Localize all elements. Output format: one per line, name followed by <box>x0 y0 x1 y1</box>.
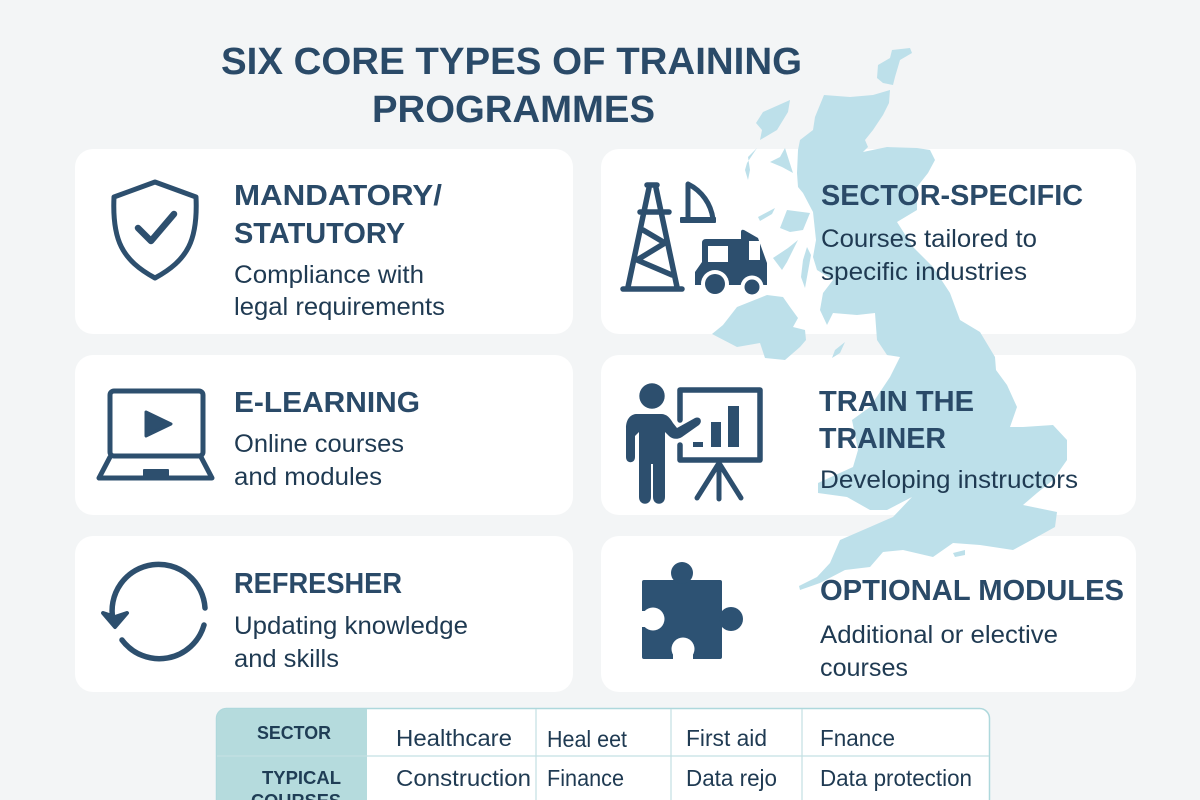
description: compliance <box>234 261 445 321</box>
description: online courses: and modules <box>234 463 382 491</box>
table row: sector <box>396 725 895 752</box>
description: developing instructors: Developing instructors <box>820 466 1078 494</box>
icon: presenter with chart board <box>626 383 760 504</box>
table row: typical courses: Construction <box>396 765 531 791</box>
description: online courses: Online courses <box>234 430 404 458</box>
icon: shield with check <box>114 182 196 278</box>
table row labels: SECTOR <box>257 723 331 743</box>
heading: train the trainer: TRAIN THE <box>819 386 974 418</box>
icon: puzzle piece <box>640 562 743 660</box>
description: tailored courses: specific industries <box>821 258 1027 286</box>
heading: mandatory/statutory: STATUTORY <box>234 218 405 250</box>
heading: train the trainer: TRAINER <box>819 423 946 455</box>
title: SIX CORE TYPES OF TRAINING <box>221 41 802 83</box>
icon: oil rig, sail and truck <box>623 184 767 298</box>
table row: typical courses: Finance <box>547 765 624 791</box>
table row labels <box>251 723 341 800</box>
heading: refresher: REFRESHER <box>234 568 402 600</box>
table row: typical courses: Data rejo <box>686 765 777 791</box>
description: elective courses: courses <box>820 654 908 682</box>
heading: optional modules: OPTIONAL MODULES <box>820 575 1124 607</box>
description: elective courses: Additional or elective <box>820 621 1058 649</box>
description: compliance: legal requirements <box>234 293 445 321</box>
table row: typical courses <box>396 765 972 791</box>
heading: train the trainer <box>819 386 974 455</box>
description: compliance: Compliance with <box>234 261 424 289</box>
description: updating knowledge <box>234 612 468 673</box>
table row: sector: First aid <box>686 725 767 751</box>
description: online courses <box>234 430 404 491</box>
table row labels: TYPICAL <box>262 768 341 788</box>
panel: sector-specific <box>601 149 1136 334</box>
table row: typical courses: Data protection <box>820 765 972 791</box>
panel: train the trainer <box>601 355 1136 515</box>
description: tailored courses: Courses tailored to <box>821 225 1037 253</box>
table row: sector: Heal eet <box>547 726 628 752</box>
title <box>221 41 802 131</box>
panel: optional modules <box>601 536 1136 692</box>
table: sectors and typical courses <box>216 708 990 800</box>
title: PROGRAMMES <box>372 89 655 131</box>
table header column <box>217 709 367 800</box>
heading: e-learning: E-LEARNING <box>234 387 420 419</box>
heading: sector-specific: SECTOR-SPECIFIC <box>821 180 1083 212</box>
heading: mandatory/statutory: MANDATORY/ <box>234 180 442 212</box>
panel: refresher <box>75 536 573 692</box>
icon: refresh arrows <box>103 564 205 659</box>
description: updating knowledge: and skills <box>234 645 339 673</box>
panel: e-learning <box>75 355 573 515</box>
table row: sector: Healthcare <box>396 725 512 751</box>
UK map background <box>712 48 1067 590</box>
heading: mandatory/statutory <box>234 180 442 250</box>
description: elective courses <box>820 621 1058 682</box>
table row: sector: Fnance <box>820 725 895 751</box>
panel: mandatory/statutory <box>75 149 573 334</box>
icon: laptop with play button <box>99 391 212 478</box>
description: tailored courses <box>821 225 1037 286</box>
description: updating knowledge: Updating knowledge <box>234 612 468 640</box>
